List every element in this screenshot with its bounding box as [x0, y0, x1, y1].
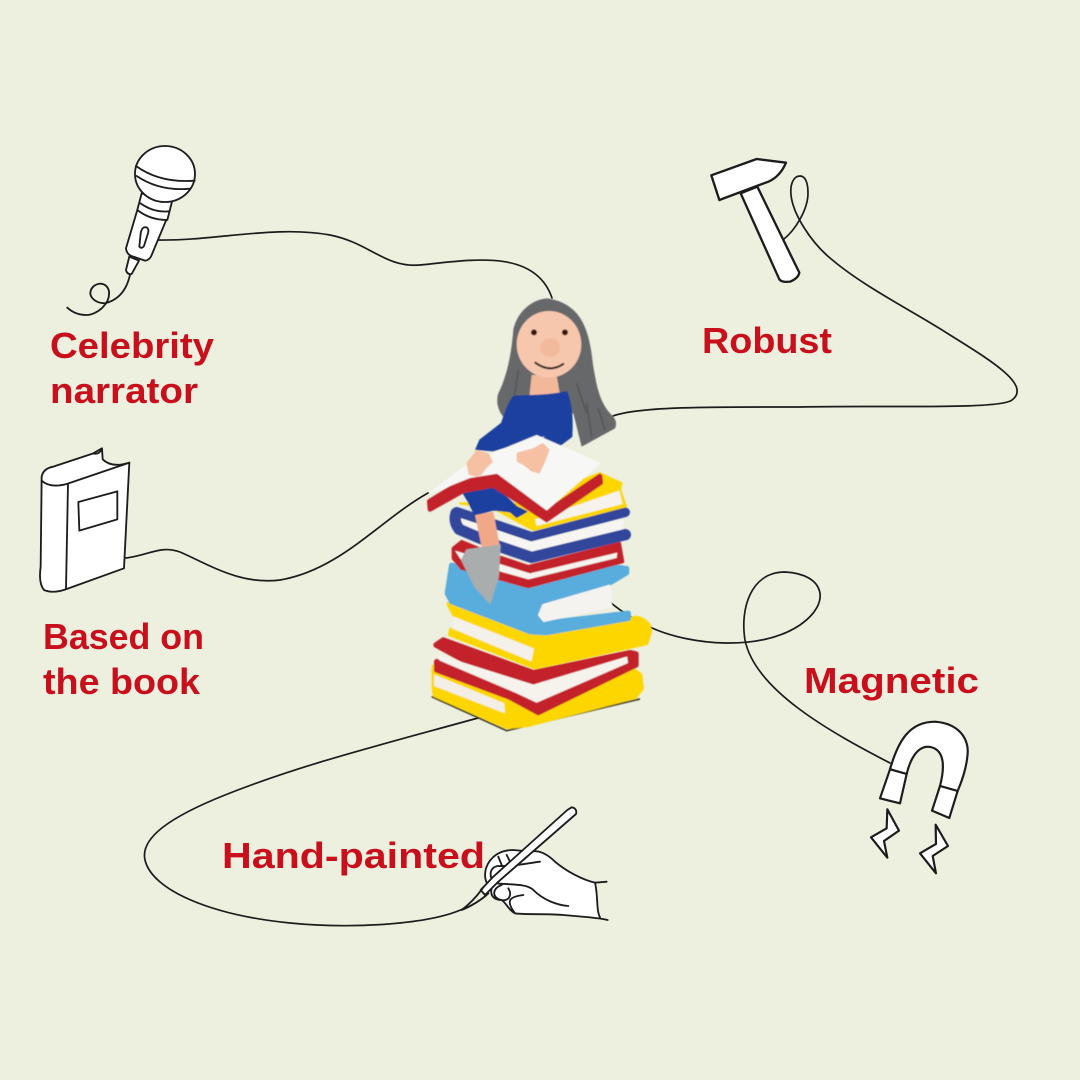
icon: hammer — [711, 159, 799, 282]
red book back — [453, 542, 623, 587]
lower book stack — [432, 565, 649, 731]
label: Robust: Robust — [702, 320, 832, 361]
neck — [529, 375, 560, 397]
face — [517, 311, 581, 378]
upper book stack — [453, 473, 626, 587]
hair strands — [513, 370, 605, 437]
skirt — [463, 485, 527, 517]
icon: hand with brush — [462, 807, 608, 920]
second yellow book — [449, 604, 649, 667]
connector: book to figure — [126, 493, 428, 581]
figure upper body — [476, 298, 616, 454]
hair — [497, 298, 616, 447]
connector: hammer to figure — [613, 176, 1017, 416]
blue book pages — [539, 586, 611, 621]
blue book bottom cover — [455, 513, 625, 557]
label: Based on the book — [43, 616, 204, 702]
shadow — [432, 697, 640, 731]
sock — [462, 545, 500, 603]
blue book pages — [456, 517, 623, 552]
yellow top book — [460, 473, 626, 530]
connector: hand to figure — [144, 718, 478, 926]
left sleeve and dress — [476, 392, 572, 454]
label: Magnetic: Magnetic — [804, 660, 979, 701]
right hand — [518, 445, 548, 472]
left hand — [468, 452, 491, 475]
bottom yellow pages — [435, 676, 504, 712]
book red cover — [429, 476, 601, 520]
yellow book pages — [535, 491, 623, 526]
icon: book — [40, 448, 129, 592]
blue book — [447, 565, 628, 633]
leg — [475, 512, 500, 547]
red book pages — [439, 656, 627, 702]
red book — [436, 640, 636, 713]
connector: microphone to figure — [158, 232, 552, 298]
red book pages — [455, 551, 617, 579]
eyes — [531, 329, 568, 335]
icon: magnet — [871, 722, 968, 873]
label: Celebrity narrator: narrator — [50, 370, 198, 411]
label: Based on the book: the book — [43, 661, 201, 702]
second yellow pages — [453, 617, 533, 661]
label: Based on the book: Based on — [43, 616, 204, 657]
nose — [540, 338, 560, 357]
blue book top cover — [457, 512, 625, 537]
label: Celebrity narrator: Celebrity — [50, 325, 214, 366]
book white pages — [431, 436, 599, 509]
label: Hand-painted: Hand-painted — [222, 835, 485, 876]
smile — [535, 363, 563, 368]
open book and legs — [429, 436, 601, 603]
icon: microphone — [67, 146, 195, 315]
connector: magnet to figure — [610, 572, 890, 763]
figurine with book stack — [429, 298, 649, 731]
bottom yellow book — [434, 667, 642, 727]
label: Celebrity narrator — [50, 325, 214, 411]
